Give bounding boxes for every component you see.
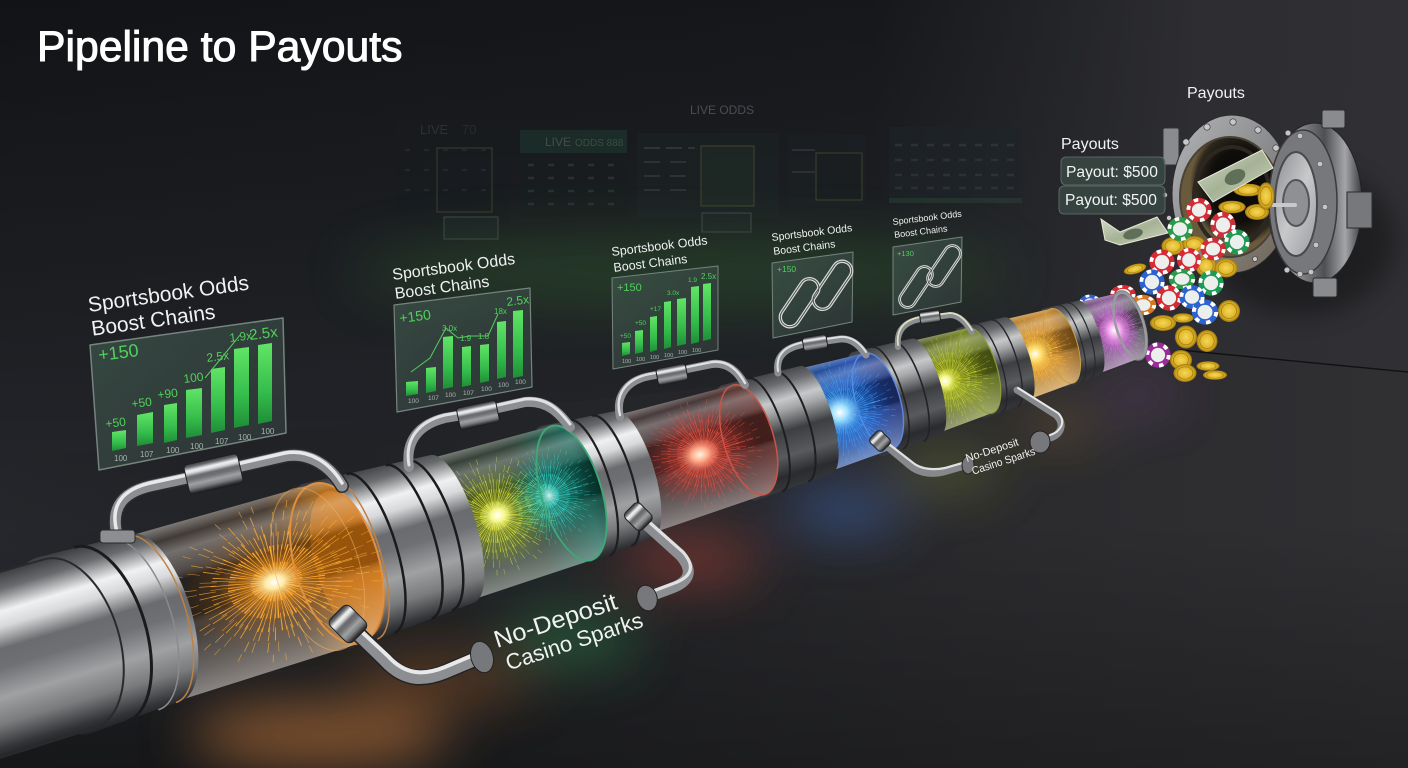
- panel 1 axis labels: 100: [166, 446, 180, 455]
- panel 2 trend line: [411, 314, 498, 372]
- label: Sportsbook Odds Boost Chains 4: Sportsbook Odds: [771, 222, 853, 244]
- door hinges: [1313, 110, 1372, 297]
- panel 3 value labels: 3.0x: [667, 290, 680, 297]
- green pitch glow: [350, 232, 1010, 312]
- chamber 1: orange glass: [127, 469, 402, 701]
- panel 2 background: [394, 288, 532, 412]
- door rivets: [1284, 130, 1328, 277]
- label: No-Deposit Casino Sparks large: No-Deposit: [491, 588, 621, 654]
- panel 4 value: +150: [777, 264, 796, 274]
- upper bypass handle 1: [115, 452, 342, 535]
- collar 1: [0, 519, 217, 748]
- panel 2 axis labels: 107: [428, 395, 439, 402]
- wall and floor junction: [1180, 350, 1408, 372]
- scoreboard panel B: [520, 128, 627, 218]
- floor: [0, 345, 1408, 768]
- panel 3 axis labels: [622, 348, 701, 365]
- panel 2 axis labels: 100: [515, 379, 526, 386]
- falling banknote: [1101, 217, 1168, 245]
- panel 2 axis labels: [408, 379, 526, 405]
- chips and coins spilling from vault: [1079, 198, 1250, 382]
- panel 1 trend line: [205, 335, 240, 378]
- vault shadow: [1205, 165, 1395, 315]
- panel 3 value labels: +17: [650, 306, 661, 313]
- floor coloured reflections: [190, 383, 1175, 767]
- scoreboard panel E: [889, 127, 1022, 203]
- goal posts: [444, 213, 751, 239]
- chamber 5: yellow glass: [891, 319, 1010, 439]
- panel 3 axis labels: 100: [636, 357, 645, 363]
- panel 3 background: [612, 266, 718, 369]
- panel 1 axis labels: 107: [140, 450, 154, 459]
- lower handle 5 end cap: [1030, 431, 1050, 453]
- door inner face: [1275, 152, 1317, 256]
- panel 2 axis labels: 107: [463, 390, 474, 397]
- panel 2 axis labels: 100: [408, 398, 419, 405]
- panel 4 chain icon: [777, 258, 855, 330]
- frame hinge: [1163, 128, 1179, 165]
- panel 1 axis labels: 100: [114, 454, 128, 463]
- label: Sportsbook Odds Boost Chains 2: [391, 251, 519, 303]
- title: Pipeline to Payouts: [37, 23, 402, 71]
- panel 3 axis labels: 100: [664, 353, 673, 359]
- panel 1 axis labels: [114, 427, 275, 463]
- label: No-Deposit Casino Sparks large: [491, 583, 646, 677]
- scoreboard panel D: [788, 135, 866, 205]
- scoreboard panel C: [637, 133, 779, 218]
- panel 2 axis labels: 100: [481, 386, 492, 393]
- payout pill 2: Payout: $500: [1065, 192, 1157, 209]
- scoreboard panel A: [395, 120, 510, 225]
- panel 2 value labels: 1.9: [460, 334, 472, 343]
- banknote in vault: [1198, 150, 1273, 202]
- chamber 3: red glass: [606, 373, 790, 537]
- panel 1 axis labels: 100: [190, 442, 204, 451]
- panel 3 axis labels: 100: [622, 359, 631, 365]
- lower handle 2 end cap: [634, 583, 660, 613]
- glass and steel pipeline: [0, 233, 1171, 768]
- panel 3 value labels: +50: [620, 333, 631, 340]
- label: No-Deposit Casino Sparks small: [964, 432, 1037, 478]
- chamber 6: amber glass: [989, 301, 1089, 405]
- chamber 2: green and teal glass: [418, 414, 622, 604]
- lower bypass handle 5: [1017, 388, 1062, 441]
- collar 2: [276, 439, 500, 657]
- label: No-Deposit Casino Sparks large: Casino Sparks: [502, 607, 646, 675]
- label: No-Deposit Casino Sparks small: No-Deposit: [964, 436, 1020, 465]
- panel 3 value labels: +50: [635, 320, 646, 327]
- panel 1 bars: [112, 343, 272, 451]
- label: No-Deposit Casino Sparks small: Casino Sparks: [970, 446, 1037, 478]
- floor shading: [0, 520, 1408, 768]
- panel 1 value labels: 100: [183, 370, 205, 386]
- panel 4 background: [772, 252, 853, 338]
- chamber 4: blue glass: [776, 343, 915, 479]
- panel 3 bars: [622, 283, 711, 356]
- collar 6: [945, 311, 1043, 422]
- panel 2 axis labels: 100: [445, 392, 456, 399]
- panel 5 value: +130: [897, 249, 914, 258]
- panel 1 value labels: 2.5x: [248, 324, 279, 344]
- collar 3: [519, 398, 675, 572]
- vault on wall: [1162, 110, 1395, 315]
- label: Payouts above vault: Payouts: [1187, 85, 1245, 102]
- label: Sportsbook Odds Boost Chains 2: Sportsbook Odds: [391, 251, 516, 284]
- sleeve on handle 4: [802, 334, 828, 352]
- panel 3 value labels: +150: [617, 282, 642, 294]
- label: Sportsbook Odds Boost Chains 1: Boost Chains: [90, 301, 217, 341]
- payout pill 2: [1059, 186, 1165, 214]
- panel 3 axis labels: 100: [692, 348, 701, 354]
- main inlet pipe: [0, 543, 143, 768]
- label: Sportsbook Odds Boost Chains 5: Sportsbook Odds: [892, 209, 963, 227]
- panel 1: odds boost bars: [90, 318, 286, 470]
- panel 1 value labels: [97, 324, 279, 431]
- LIVE ODDS heading: LIVE ODDS: [690, 103, 754, 117]
- panel 1 value labels: +50: [131, 395, 153, 411]
- upper bypass handle 3: [619, 362, 745, 417]
- lower handle 1 fitting: [327, 603, 369, 645]
- end ring: [1106, 288, 1153, 363]
- panel 2 bars: [406, 310, 523, 396]
- scoreboard panel B: LIVE: [545, 135, 571, 149]
- door hub: [1283, 180, 1309, 226]
- panel 3 axis labels: 100: [678, 350, 687, 356]
- scoreboard panel A: LIVE: [420, 122, 449, 137]
- lighter right wall: [0, 0, 1408, 400]
- lower handle 1 end cap: [467, 638, 497, 676]
- lower bypass handle 1: [346, 619, 478, 678]
- payout pill 1: Payout: $500: [1066, 164, 1158, 181]
- panel 1 axis labels: 100: [238, 433, 252, 442]
- panel 5: chain links: [893, 237, 963, 315]
- upper bypass handle 5: [898, 313, 972, 347]
- label: Sportsbook Odds Boost Chains 4: Boost Chains: [773, 238, 836, 258]
- panel 3: odds boost bars: [612, 266, 718, 369]
- scoreboard panel A: 70: [462, 122, 476, 137]
- label: Sportsbook Odds Boost Chains 3: Boost Chains: [613, 252, 688, 275]
- panel 1 axis labels: 107: [215, 437, 229, 446]
- panel 3 value labels: [617, 272, 716, 340]
- panel 3 value labels: 2.5x: [701, 272, 716, 281]
- lower bypass handle 2: [638, 514, 690, 597]
- panel 1 value labels: +50: [105, 415, 127, 431]
- background stadium scoreboards: [395, 103, 1022, 239]
- panel 4: chain links: [772, 252, 855, 338]
- foot fitting of handle 1: [100, 530, 135, 543]
- panel 1 value labels: +90: [157, 386, 179, 402]
- panel 2 value labels: 1.8: [478, 332, 490, 341]
- door ring: [1269, 130, 1337, 274]
- lower bypass handle 4: [880, 438, 966, 473]
- collar 4: [704, 357, 849, 506]
- lower handle 4 fitting: [868, 429, 892, 453]
- vault frame ring: [1172, 115, 1292, 273]
- panel 5 background: [893, 237, 962, 315]
- panel 3 axis labels: 100: [650, 355, 659, 361]
- sleeve on handle 1: [183, 453, 244, 495]
- panel 2 axis labels: 100: [498, 382, 509, 389]
- panel 2: odds boost bars: [394, 288, 532, 412]
- panel 1 value labels: 1.9x: [229, 328, 253, 345]
- sleeve on handle 2: [456, 400, 500, 430]
- label: Sportsbook Odds Boost Chains 2: Boost Chains: [394, 274, 490, 303]
- label: Sportsbook Odds Boost Chains 3: [611, 233, 710, 275]
- label: Sportsbook Odds Boost Chains 1: [86, 272, 254, 341]
- upper bypass handle 2: [408, 399, 570, 467]
- panel 2 value labels: 3.0x: [442, 324, 457, 333]
- chamber 7: purple glass: [1070, 285, 1155, 376]
- panel 3 value labels: 1.9: [688, 277, 697, 284]
- payout pill 1: [1061, 157, 1165, 185]
- label: Sportsbook Odds Boost Chains 1: Sportsbook Odds: [86, 272, 250, 317]
- panel 2 value labels: +150: [398, 306, 432, 326]
- sleeve on handle 5: [919, 310, 941, 324]
- collar 7: [1032, 295, 1112, 391]
- scoreboard panel B: ODDS 888: [575, 138, 624, 149]
- interior rings: [1194, 147, 1270, 247]
- panel 2 value labels: 18x: [494, 307, 507, 316]
- collar 5: [837, 330, 956, 461]
- panel 5 chain icon: [897, 242, 963, 311]
- panel 1 background: [90, 318, 286, 470]
- upper bypass handle 4: [778, 337, 866, 373]
- panel 2 value labels: 2.5x: [506, 292, 530, 309]
- panel 2 value labels: [398, 292, 530, 343]
- vault door: [1268, 123, 1362, 283]
- sleeve on handle 3: [656, 363, 688, 386]
- label: Sportsbook Odds Boost Chains 3: Sportsbook Odds: [611, 233, 708, 259]
- label: Sportsbook Odds Boost Chains 5: Boost Chains: [894, 223, 948, 240]
- label: Payouts beside pills: Payouts: [1061, 136, 1119, 153]
- label: Sportsbook Odds Boost Chains 4: [771, 222, 855, 258]
- panel 1 value labels: +150: [97, 340, 140, 365]
- panel 1 axis labels: 100: [261, 427, 275, 436]
- panel 1 value labels: 2.5x: [206, 348, 230, 365]
- label: Sportsbook Odds Boost Chains 5: [892, 209, 964, 240]
- lower handle 2 fitting: [622, 501, 654, 533]
- rivets: [1162, 119, 1279, 268]
- gold pile inside vault: [1218, 182, 1274, 220]
- lower handle 4 end cap: [962, 456, 974, 474]
- vault interior: [1180, 137, 1280, 257]
- door handle: [1273, 203, 1295, 207]
